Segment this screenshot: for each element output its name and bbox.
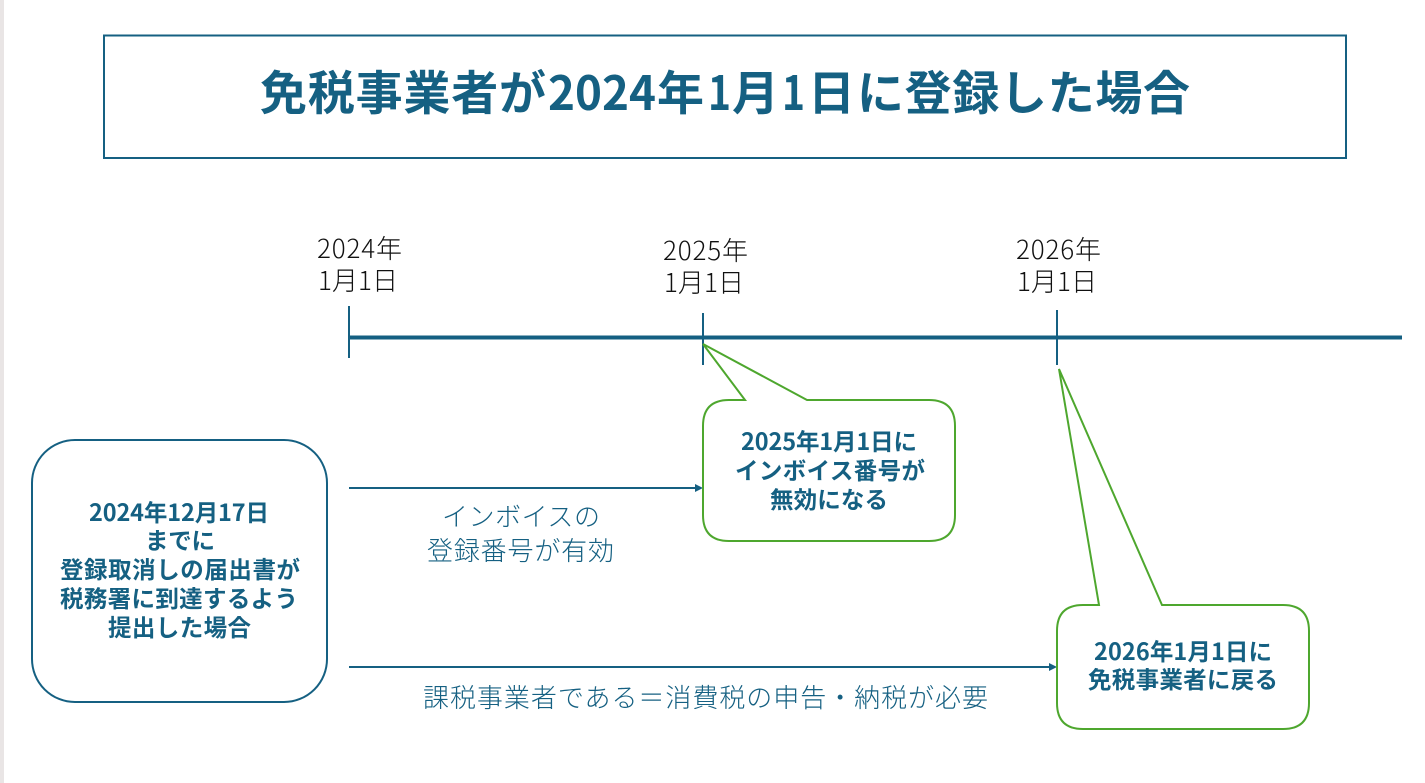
callout: 2026 returns to tax-exempt: 2026年1月1日に: [1094, 633, 1272, 667]
callout: 2025 invoice number invalid: インボイス番号が: [735, 452, 926, 486]
title: [104, 36, 1346, 158]
callout: 2024 registration cancellation: 2024年12月17日: [89, 494, 269, 528]
label: taxable business: 課税事業者である＝消費税の申告・納税が必要: [423, 678, 988, 715]
date label: 2026: 2026年: [1016, 230, 1101, 267]
label: invoice number valid: インボイスの: [442, 497, 600, 534]
callout: 2024 registration cancellation: [32, 440, 327, 702]
title: 2024: [548, 55, 656, 124]
date label: 2024: [317, 229, 402, 298]
callout: 2025 invoice number invalid: 無効になる: [770, 481, 888, 515]
title: 年: [657, 55, 704, 124]
date label: 2025: 1月1日: [664, 263, 744, 300]
date label: 2026: 1月1日: [1017, 262, 1097, 299]
title: 日: [808, 55, 855, 124]
date label: 2025: 2025年: [663, 231, 748, 268]
callout: 2024 registration cancellation: 登録取消しの届出書が: [60, 551, 300, 585]
callout: 2024 registration cancellation: までに: [145, 522, 215, 556]
timeline axis: [349, 306, 1402, 365]
title: 1: [782, 55, 805, 124]
arrow: invoice number valid: [349, 484, 703, 492]
title: に登録した場合: [857, 55, 1190, 124]
label: invoice number valid: 登録番号が有効: [427, 531, 614, 568]
title: 月: [732, 55, 779, 124]
arrow: taxable business: [349, 663, 1057, 671]
date label: 2025: [663, 231, 748, 300]
callout: 2024 registration cancellation: 税務署に到達するよう: [60, 580, 298, 614]
callout: 2025 invoice number invalid: 2025年1月1日に: [741, 423, 917, 457]
callout: 2025 invoice number invalid: [703, 344, 955, 541]
title: 免税事業者が: [260, 55, 546, 124]
callout: 2026 returns to tax-exempt: [1057, 369, 1309, 729]
callout: 2024 registration cancellation: 提出した場合: [108, 609, 252, 643]
date label: 2026: [1016, 230, 1101, 299]
label: invoice number valid: [427, 497, 614, 568]
callout: 2026 returns to tax-exempt: 免税事業者に戻る: [1088, 661, 1278, 695]
title: 1: [708, 55, 731, 124]
date label: 2024: 1月1日: [318, 261, 398, 298]
date label: 2024: 2024年: [317, 229, 402, 266]
